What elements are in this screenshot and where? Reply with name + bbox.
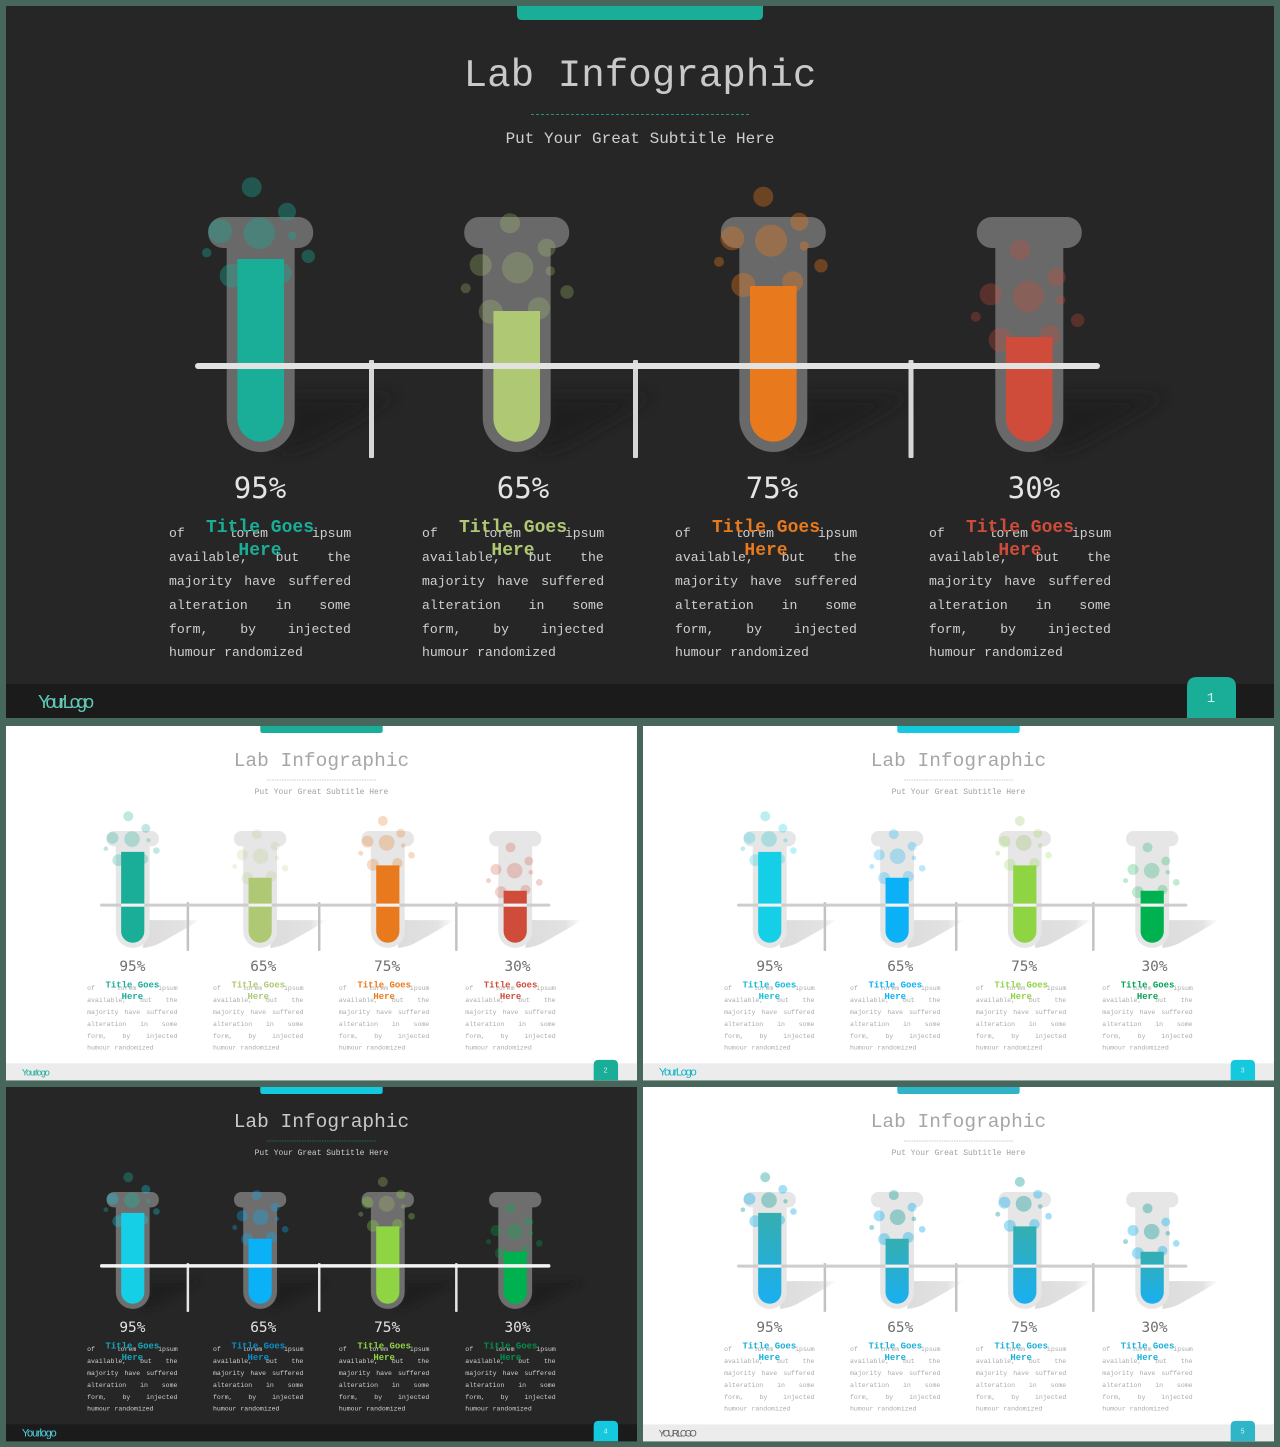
column 4 text: majority have suffered [465,1370,556,1377]
column 1 text: alteration in some [87,1382,177,1389]
percent labels [119,1320,531,1336]
column 2 text: Here [248,1353,269,1363]
title: Lab Infographic [234,1111,409,1133]
top tab [897,726,1020,733]
column 2 text: form, by injected [213,1033,303,1040]
column 4 text: majority have suffered [1102,1370,1193,1377]
column 3 text: form, by injected [339,1033,429,1040]
column 4 text: of lorem ipsum [929,526,1111,541]
column 4 text: form, by injected [929,622,1111,637]
column 2 text: available, but the [850,997,940,1004]
percent labels: 65% [497,471,549,505]
column 1 text: majority have suffered [724,1009,815,1016]
column 1 text: Here [122,992,143,1002]
column 4 text: Title Goes [1121,981,1174,991]
column 1 text: alteration in some [87,1021,177,1028]
column 1 text: of lorem ipsum [724,1346,815,1353]
column 3 text: Here [373,1353,395,1363]
percent labels: 95% [756,1320,783,1336]
subtitle: Put Your Great Subtitle Here [892,1149,1026,1158]
column 1 text: Here [759,992,780,1002]
title: Lab Infographic [871,1111,1046,1133]
column 4 text: humour randomized [1102,1044,1169,1051]
column 1 text: available, but the [724,997,814,1004]
column 1 text: alteration in some [169,598,351,613]
test tube 1: 95% [104,811,160,948]
page tag: 2 [604,1067,608,1075]
column 2 text: humour randomized [213,1044,280,1051]
column 1 text: alteration in some [724,1021,814,1028]
column 4 text: humour randomized [929,645,1063,660]
column 1 text: of lorem ipsum [169,526,351,541]
column 1 text: of lorem ipsum [87,1346,178,1353]
page tag: 3 [1241,1067,1245,1075]
column 3 text: humour randomized [675,645,809,660]
column 4 text: alteration in some [929,598,1111,613]
column 4 text: available, but the [465,1358,556,1365]
logo: YourLogo [659,1066,697,1078]
percent labels: 30% [1008,471,1060,505]
column 1 text [724,981,815,1051]
column 2 text: humour randomized [213,1405,280,1412]
column 4 text: Title Goes [484,1342,537,1352]
column 1 text: available, but the [169,550,351,565]
footer bar [6,684,1274,718]
column 4 text: available, but the [465,997,556,1004]
percent labels: 30% [1142,959,1168,975]
tube shadows [780,1281,1219,1309]
column 3 text: Title Goes [994,1342,1048,1352]
test tube 4: 30% [1123,1192,1180,1309]
column 2 text: available, but the [850,1358,940,1365]
slide 2: light warm [6,726,637,1080]
column 2 text: of lorem ipsum [213,1346,304,1353]
column 2 text: form, by injected [422,622,604,637]
column 3 text: Title Goes [994,981,1048,991]
column 2 text: of lorem ipsum [422,526,604,541]
column 3 text: available, but the [339,997,429,1004]
column 2 text: form, by injected [213,1394,303,1401]
column 1 text: majority have suffered [87,1009,178,1016]
test tube rack [824,1263,1095,1312]
subtitle: Put Your Great Subtitle Here [892,788,1026,797]
footer bar [6,1424,637,1441]
column 4 text: Here [500,1353,521,1363]
test tube 4: 30% [486,831,543,948]
column 4 text [465,981,556,1051]
column 1 text: Here [238,541,282,561]
column 3 text [339,981,430,1051]
column 2 text [850,981,941,1051]
column 3 text: of lorem ipsum [976,985,1067,992]
column 3 text: Here [1010,992,1032,1002]
column 3 text [976,1342,1067,1412]
column 2 text [850,1342,941,1412]
title: Lab Infographic [871,750,1046,772]
column 1 text [87,981,178,1051]
column 1 text: form, by injected [724,1033,815,1040]
column 4 text: of lorem ipsum [465,985,556,992]
column 4 text: available, but the [1102,1358,1193,1365]
percent labels [234,471,1060,505]
column 3 text: humour randomized [339,1405,405,1412]
column 2 text: form, by injected [850,1394,940,1401]
percent labels: 75% [374,1320,400,1336]
column 1 text: Title Goes [743,1342,796,1352]
percent labels [756,1320,1168,1336]
column 3 text: Title Goes [357,981,411,991]
column 2 text: majority have suffered [213,1370,303,1377]
page tag: 4 [604,1428,608,1436]
column 1 text: humour randomized [724,1044,791,1051]
percent labels [119,959,531,975]
column 1 text: majority have suffered [724,1370,815,1377]
column 3 text: available, but the [976,1358,1066,1365]
column 2 text: of lorem ipsum [850,1346,941,1353]
logo: Yourlogo [22,1427,57,1439]
column 1 text: humour randomized [87,1405,154,1412]
column 1 text: alteration in some [724,1382,814,1389]
percent labels: 75% [746,471,798,505]
percent labels: 30% [1142,1320,1168,1336]
top tab [260,1087,383,1094]
test tube 3: 75% [995,1177,1052,1309]
column 1 text: form, by injected [169,622,351,637]
column 4 text: Here [500,992,521,1002]
column 4 text: of lorem ipsum [1102,985,1193,992]
test tube 2: 65% [869,829,925,948]
tube shadows [143,1281,582,1309]
column 3 text: majority have suffered [675,574,857,589]
column 1 text: humour randomized [724,1405,791,1412]
column 3 text: of lorem ipsum [339,1346,430,1353]
rack bar [737,904,1187,907]
column 3 text: of lorem ipsum [339,985,430,992]
percent labels: 95% [119,959,146,975]
column 3 text: majority have suffered [339,1370,429,1377]
column 2 text: alteration in some [850,1021,940,1028]
column 4 text: form, by injected [465,1394,556,1401]
column 2 text [422,518,604,660]
column 1 text: form, by injected [724,1394,815,1401]
slide 3: light cool [643,726,1274,1080]
column 1 text [87,1342,178,1412]
column 2 text: Here [491,541,535,561]
column 3 text: available, but the [675,550,857,565]
column 2 text: of lorem ipsum [213,985,304,992]
column 1 text: form, by injected [87,1394,178,1401]
subtitle: Put Your Great Subtitle Here [255,1149,389,1158]
footer bar [643,1424,1274,1441]
column 3 text: humour randomized [976,1044,1042,1051]
page tag: 1 [1207,691,1215,707]
column 1 text: Here [759,1353,780,1363]
column 3 text: form, by injected [675,622,857,637]
test tube 2: 65% [232,829,288,948]
column 1 text: Title Goes [106,981,159,991]
percent labels: 65% [250,1320,277,1336]
column 4 text: humour randomized [465,1044,532,1051]
column 1 text: available, but the [87,997,177,1004]
test tube 1: 95% [741,811,797,948]
column 4 text: alteration in some [1102,1021,1193,1028]
column 4 text: Here [1137,992,1158,1002]
subtitle: Put Your Great Subtitle Here [506,130,774,148]
column 3 text: form, by injected [976,1033,1066,1040]
title: Lab Infographic [464,53,816,98]
percent labels: 95% [756,959,783,975]
column 2 text: Here [885,992,906,1002]
column 4 text: form, by injected [1102,1394,1193,1401]
percent labels: 75% [1011,1320,1037,1336]
subtitle: Put Your Great Subtitle Here [255,788,389,797]
column 3 text: humour randomized [339,1044,405,1051]
test tube rack [187,902,458,951]
test tube 4: 30% [486,1192,543,1309]
percent labels [756,959,1168,975]
logo: Yourlogo [22,1067,50,1077]
column 3 text: alteration in some [675,598,857,613]
percent labels: 65% [887,1320,914,1336]
column 3 text: Title Goes [357,1342,411,1352]
column 2 text: humour randomized [422,645,556,660]
column 3 text: Here [1010,1353,1032,1363]
column 1 text: humour randomized [87,1044,154,1051]
test tube 2: 65% [232,1190,288,1309]
page tag [1187,677,1236,718]
column 4 text: majority have suffered [929,574,1111,589]
column 1 text: Title Goes [106,1342,159,1352]
column 4 text: available, but the [929,550,1111,565]
column 2 text: Title Goes [868,981,922,991]
column 3 text [675,518,857,660]
column 3 text: majority have suffered [339,1009,429,1016]
column 4 text: Here [998,541,1042,561]
page tag: 5 [1241,1428,1245,1436]
column 3 text: alteration in some [339,1021,429,1028]
logo: YourLogo [38,692,94,712]
column 3 text: Title Goes [712,518,820,538]
tube shadows [281,396,1164,452]
test tube 3: 75% [358,1177,415,1309]
test tube rack [195,360,1100,458]
slide 1: large dark [6,6,1274,718]
column 1 text: available, but the [87,1358,177,1365]
column 4 text: of lorem ipsum [1102,1346,1193,1353]
percent labels: 75% [1011,959,1037,975]
column 2 text: alteration in some [213,1382,303,1389]
column 3 text: form, by injected [339,1394,429,1401]
column 4 text: majority have suffered [465,1009,556,1016]
column 2 text: Here [885,1353,906,1363]
percent labels: 65% [887,959,914,975]
column 4 text: form, by injected [1102,1033,1193,1040]
column 2 text: majority have suffered [422,574,604,589]
percent labels: 65% [250,959,277,975]
test tube 4: 30% [971,217,1084,452]
column 3 text [976,981,1067,1051]
footer bar [643,1063,1274,1080]
column 2 text: Title Goes [231,981,285,991]
column 1 text: majority have suffered [87,1370,178,1377]
tube shadows [143,920,582,948]
column 2 text: available, but the [213,1358,303,1365]
column 4 text: alteration in some [465,1382,556,1389]
footer bar [6,1063,637,1080]
column 2 text: humour randomized [850,1405,917,1412]
column 4 text: form, by injected [465,1033,556,1040]
rack bar [737,1265,1187,1268]
column 2 text: Here [248,992,269,1002]
column 2 text: Title Goes [459,518,567,538]
column 4 text: Title Goes [966,518,1074,538]
column 1 text [724,1342,815,1412]
test tube rack [100,1263,550,1312]
column 1 text: Here [122,1353,143,1363]
column 4 text [465,1342,556,1412]
column 3 text: majority have suffered [976,1370,1066,1377]
test tube 3: 75% [358,816,415,948]
percent labels: 75% [374,959,400,975]
top tab [517,6,763,20]
column 4 text: Title Goes [484,981,537,991]
column 2 text: available, but the [213,997,303,1004]
column 3 text: alteration in some [339,1382,429,1389]
page tag [594,1060,618,1080]
column 4 text: alteration in some [1102,1382,1193,1389]
column 2 text: Title Goes [231,1342,285,1352]
column 3 text: available, but the [339,1358,429,1365]
column 1 text: of lorem ipsum [724,985,815,992]
title: Lab Infographic [234,750,409,772]
column 2 text: majority have suffered [213,1009,303,1016]
column 3 text: alteration in some [976,1382,1066,1389]
tube shadows [780,920,1219,948]
column 4 text: available, but the [1102,997,1193,1004]
column 1 text [169,518,351,660]
column 4 text: of lorem ipsum [465,1346,556,1353]
column 4 text: humour randomized [1102,1405,1169,1412]
column 3 text: of lorem ipsum [976,1346,1067,1353]
column 2 text: majority have suffered [850,1370,940,1377]
column 3 text: alteration in some [976,1021,1066,1028]
test tube 2: 65% [869,1190,925,1309]
percent labels: 30% [505,1320,531,1336]
slide 5: light blue gradient [643,1087,1274,1441]
column 2 text: alteration in some [213,1021,303,1028]
column 3 text: Here [744,541,788,561]
column 3 text: Here [373,992,395,1002]
top tab [260,726,383,733]
column 3 text: humour randomized [976,1405,1042,1412]
column 4 text [1102,1342,1193,1412]
column 1 text: Title Goes [743,981,796,991]
column 2 text [213,1342,304,1412]
column 1 text: majority have suffered [169,574,351,589]
column 2 text: available, but the [422,550,604,565]
percent labels: 30% [505,959,531,975]
percent labels: 95% [119,1320,146,1336]
column 4 text [929,518,1111,660]
test tube 2: 65% [461,213,574,452]
column 2 text: alteration in some [850,1382,940,1389]
slide 4: dark cool [6,1087,637,1441]
column 1 text: of lorem ipsum [87,985,178,992]
page tag [1231,1421,1255,1441]
column 4 text: alteration in some [465,1021,556,1028]
column 1 text: available, but the [724,1358,814,1365]
percent labels: 95% [234,471,286,505]
column 2 text: form, by injected [850,1033,940,1040]
test tube rack [824,902,1095,951]
column 1 text: form, by injected [87,1033,178,1040]
column 3 text [339,1342,430,1412]
column 3 text: available, but the [976,997,1066,1004]
test tube 3: 75% [995,816,1052,948]
column 1 text: Title Goes [206,518,314,538]
test tube 3: 75% [714,187,828,452]
top tab [897,1087,1020,1094]
page tag [594,1421,618,1441]
column 4 text: humour randomized [465,1405,532,1412]
logo: YOUR LOGO [659,1428,697,1438]
column 4 text [1102,981,1193,1051]
column 2 text: of lorem ipsum [850,985,941,992]
column 1 text: humour randomized [169,645,303,660]
test tube 1: 95% [202,177,315,452]
column 4 text: Title Goes [1121,1342,1174,1352]
column 2 text: humour randomized [850,1044,917,1051]
column 4 text: majority have suffered [1102,1009,1193,1016]
column 2 text: Title Goes [868,1342,922,1352]
column 3 text: majority have suffered [976,1009,1066,1016]
page tag [1231,1060,1255,1080]
column 4 text: Here [1137,1353,1158,1363]
rack bar [100,904,550,907]
column 2 text: alteration in some [422,598,604,613]
test tube 4: 30% [1123,831,1180,948]
column 2 text [213,981,304,1051]
test tube 1: 95% [741,1172,797,1309]
column 3 text: of lorem ipsum [675,526,857,541]
column 2 text: majority have suffered [850,1009,940,1016]
column 3 text: form, by injected [976,1394,1066,1401]
test tube 1: 95% [104,1172,160,1309]
